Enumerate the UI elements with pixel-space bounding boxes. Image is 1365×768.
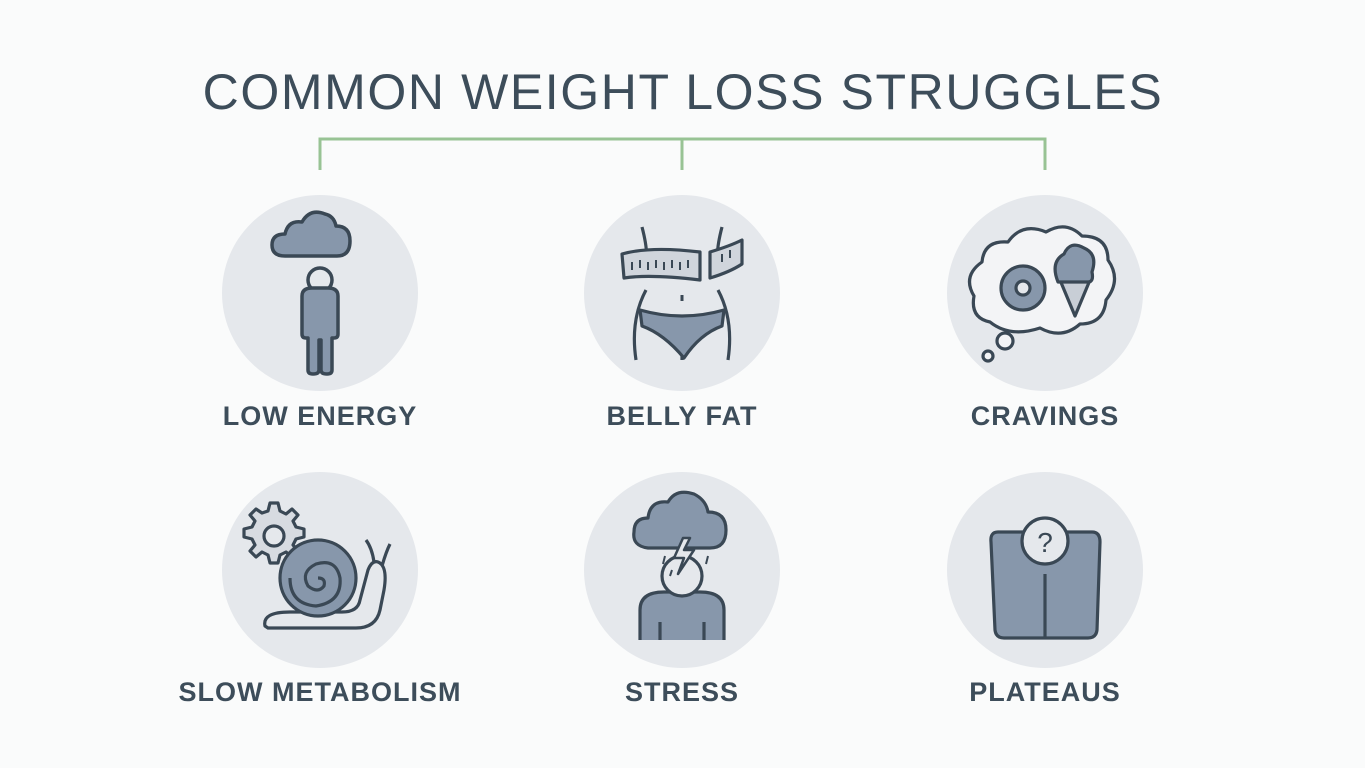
- icon: scale with question mark: ?: [1037, 527, 1053, 558]
- icon: storm cloud over head: [634, 492, 726, 640]
- label: BELLY FAT: [606, 401, 758, 431]
- connector bracket: [320, 139, 1045, 170]
- title: COMMON WEIGHT LOSS STRUGGLES: [203, 64, 1163, 120]
- icon: gear and snail: [244, 503, 390, 628]
- panel: cravings: [947, 195, 1143, 431]
- panel: belly fat: [584, 195, 780, 431]
- panel: slow metabolism: [179, 472, 461, 707]
- panel: low energy: [222, 195, 418, 431]
- panel: plateaus: [947, 472, 1143, 707]
- label: CRAVINGS: [971, 401, 1119, 431]
- label: LOW ENERGY: [223, 401, 417, 431]
- label: PLATEAUS: [969, 677, 1121, 707]
- label: STRESS: [625, 677, 739, 707]
- icon: thought bubble with donut and ice cream: [970, 227, 1115, 361]
- panel: stress: [584, 472, 780, 707]
- icon: scale with question mark: [991, 518, 1100, 638]
- icon: cloud over person: [272, 212, 350, 374]
- label: SLOW METABOLISM: [179, 677, 461, 707]
- icon: waist with tape: [622, 227, 742, 360]
